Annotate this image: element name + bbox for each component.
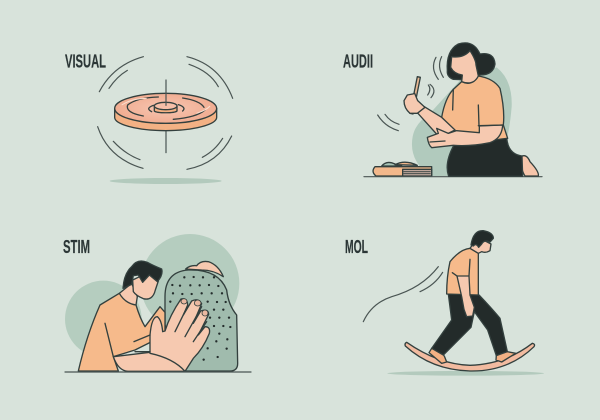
big hand (150, 299, 210, 371)
face (133, 272, 158, 299)
hand on top (186, 261, 223, 277)
legs (447, 137, 523, 176)
shirt (78, 293, 165, 371)
dots (169, 276, 231, 361)
forearm (113, 352, 185, 371)
panel: visual (65, 52, 233, 184)
ground line (65, 370, 251, 374)
arm and hand (457, 276, 474, 317)
foot (521, 156, 538, 176)
hand raised (404, 93, 425, 113)
dotted stone (165, 270, 238, 371)
illustration: man on balance board (363, 231, 544, 376)
spindle upper (164, 80, 168, 105)
disc (115, 93, 217, 131)
book (373, 162, 432, 176)
motion arcs (98, 57, 233, 169)
heading: VISUAL: VISUAL (65, 52, 106, 72)
sound waves (378, 57, 443, 131)
heading: MOL: MOL (345, 237, 368, 257)
panel: audio (343, 43, 542, 177)
shirt (447, 248, 478, 295)
board shadow (387, 371, 544, 376)
heading: STIM: STIM (63, 237, 90, 257)
disc shadow (110, 178, 222, 184)
head (470, 240, 491, 253)
background blob (412, 67, 512, 176)
illustration: man touching dotted stone (65, 234, 251, 372)
arm raised (417, 107, 455, 136)
hair (471, 231, 493, 247)
ground line (364, 175, 542, 178)
illustration: spinning disc (98, 57, 233, 184)
legs (432, 294, 507, 356)
fingertips (181, 299, 208, 316)
neck (119, 283, 137, 305)
spindle lower (164, 132, 168, 153)
rocker board (405, 342, 535, 371)
heading: AUDII: AUDII (343, 52, 373, 72)
stick (410, 77, 420, 114)
hair (447, 43, 495, 80)
arm lower and hand (427, 125, 503, 148)
neck and face (451, 51, 478, 83)
feet (429, 348, 516, 363)
shirt (442, 76, 508, 140)
panel: stimulation (63, 234, 251, 372)
wind lines (363, 267, 443, 322)
hair (123, 261, 162, 288)
panel: motion (345, 231, 544, 376)
background circles (65, 234, 239, 357)
illustration: woman with stick (364, 43, 542, 177)
